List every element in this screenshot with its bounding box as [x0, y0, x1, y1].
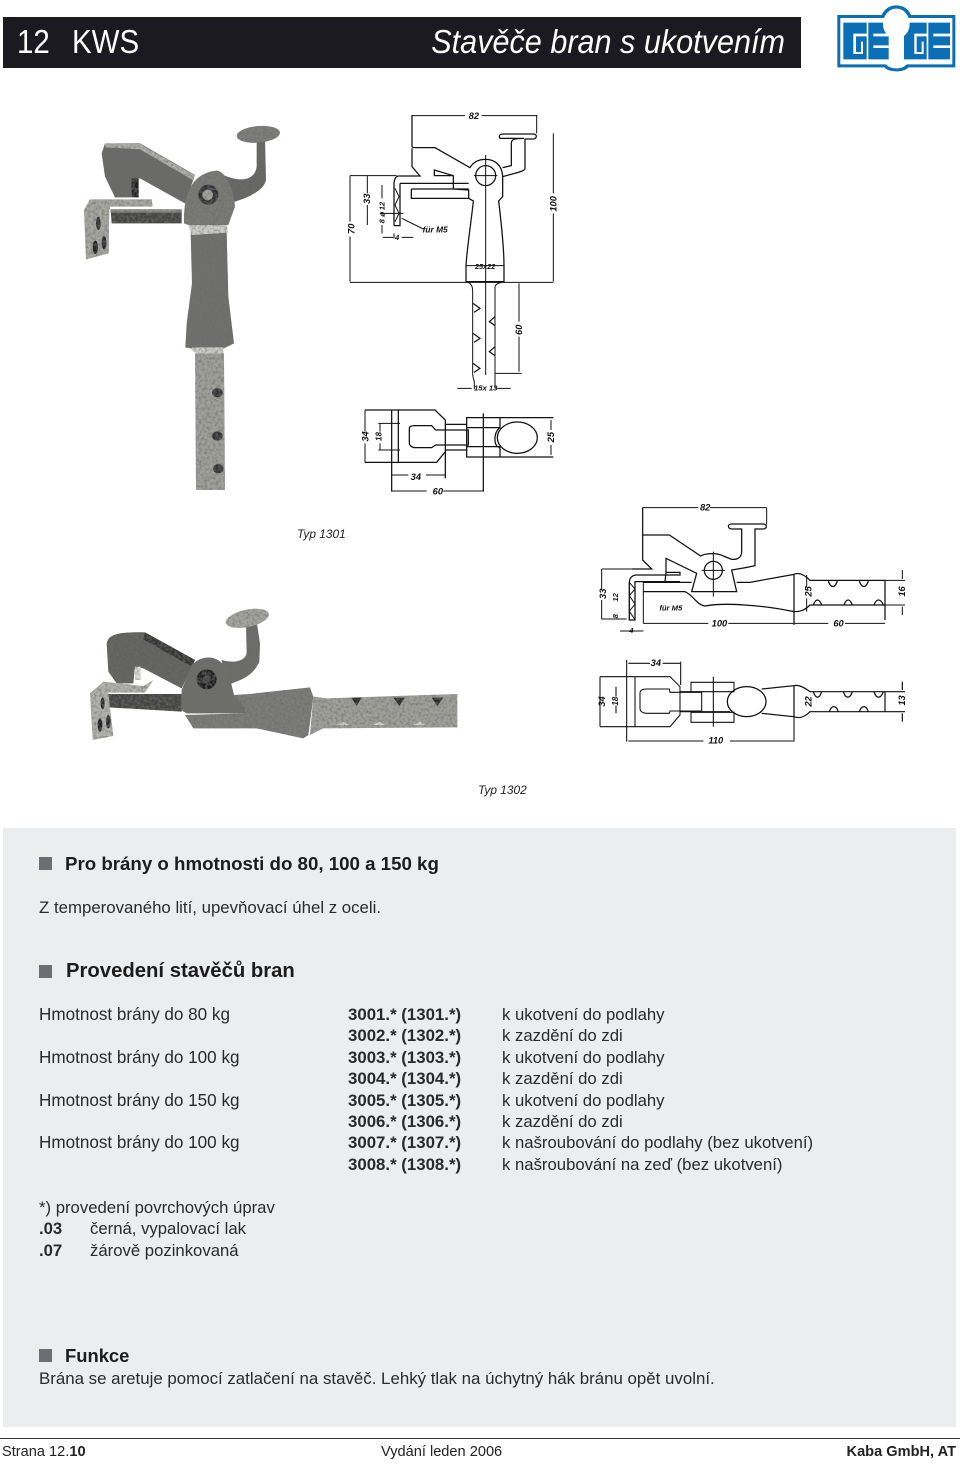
- technical drawing: type 1302: 60: [833, 618, 845, 628]
- technical drawing: type 1302: 100: [712, 618, 728, 628]
- column: mounting type: k ukotvení do podlahy: [502, 1091, 665, 1110]
- technical drawing: type 1301: 8 ⌀ 12: [377, 201, 386, 223]
- technical drawing: type 1302: 34: [651, 658, 662, 668]
- technical drawing: type 1302: 33: [598, 588, 608, 599]
- surface finish notes: [39, 1198, 275, 1260]
- technical drawing: type 1302: 13: [897, 694, 907, 706]
- technical drawing: type 1302: 34: [597, 695, 607, 707]
- column: gate weight: Hmotnost brány do 80 kg: [39, 1005, 230, 1024]
- technical drawing: type 1301: für M5: [423, 224, 448, 234]
- technical drawing: type 1301: 25: [546, 431, 556, 443]
- logo: GEGE keyhole: [837, 5, 956, 72]
- technical drawing: type 1301: 18: [375, 432, 384, 441]
- technical drawing: type 1301: 100: [549, 195, 559, 212]
- technical drawing: type 1302: für M5: [659, 603, 683, 612]
- column: article numbers: 3003.* (1303.*): [348, 1048, 461, 1067]
- caption: type 1302: Typ 1302: [478, 783, 527, 797]
- column: mounting type: [502, 1005, 813, 1174]
- column: gate weight: Hmotnost brány do 100 kg: [39, 1048, 240, 1067]
- photo: gate stopper type 1301: [84, 124, 281, 490]
- technical drawing: type 1302: 12: [611, 592, 620, 602]
- column: article numbers: 3004.* (1304.*): [348, 1069, 461, 1088]
- column: mounting type: k našroubování na zeď (bez ukotvení): [502, 1155, 782, 1174]
- version table: [39, 1005, 813, 1174]
- technical drawing: type 1301: 60: [433, 486, 444, 496]
- panel: specifications: [3, 828, 956, 1427]
- column: gate weight: Hmotnost brány do 150 kg: [39, 1091, 240, 1110]
- technical drawing: type 1302: 8: [611, 613, 620, 618]
- technical drawing: type 1301: 82: [469, 111, 480, 121]
- technical drawing: type 1301: 15x 13: [474, 384, 498, 393]
- section heading: stopper versions: Provedení stavěčů bran: [66, 960, 295, 982]
- column: mounting type: k zazdění do zdi: [502, 1112, 623, 1131]
- photo: gate stopper type 1302: [90, 605, 457, 740]
- column: mounting type: k ukotvení do podlahy: [502, 1005, 665, 1024]
- technical drawing: type 1301: 60: [514, 324, 524, 335]
- technical drawing: type 1301: 70: [346, 223, 356, 234]
- technical drawing: type 1301: 25x22: [474, 262, 495, 271]
- technical drawing: type 1301: 34: [361, 430, 371, 442]
- technical drawing: type 1301: 34: [411, 472, 422, 482]
- surface finish notes: *) provedení povrchových úprav: [39, 1198, 275, 1217]
- surface finish notes: černá, vypalovací lak: [90, 1219, 246, 1238]
- page title: Stavěče bran s ukotvením: [431, 24, 785, 60]
- technical drawing: type 1302: 16: [897, 585, 907, 597]
- technical drawing: type 1302: 4: [628, 626, 633, 635]
- chapter number and code: 12 KWS: [17, 24, 139, 61]
- surface finish notes: žárově pozinkovaná: [90, 1241, 239, 1260]
- column: article numbers: 3008.* (1308.*): [348, 1155, 461, 1174]
- page number: Strana 12.10: [2, 1444, 86, 1460]
- technical drawing: type 1302: 82: [700, 503, 711, 513]
- column: mounting type: k zazdění do zdi: [502, 1026, 623, 1045]
- edition date: Vydání leden 2006: [381, 1444, 502, 1460]
- section heading: gate weights: Pro brány o hmotnosti do 80, 100 a 150 kg: [65, 853, 439, 874]
- technical drawing: type 1302: 25: [803, 585, 813, 598]
- footer: [0, 1438, 960, 1460]
- column: mounting type: k našroubování do podlahy (bez ukotvení): [502, 1133, 813, 1152]
- technical drawing: type 1301: [346, 111, 559, 496]
- column: mounting type: k ukotvení do podlahy: [502, 1048, 665, 1067]
- technical drawing: type 1302: 110: [708, 735, 724, 745]
- company: Kaba GmbH, AT: [847, 1444, 956, 1460]
- column: article numbers: 3002.* (1302.*): [348, 1026, 461, 1045]
- technical drawing: type 1301: 33: [362, 193, 372, 204]
- column: article numbers: 3001.* (1301.*): [348, 1005, 461, 1024]
- surface finish notes: .03: [39, 1219, 62, 1238]
- column: mounting type: k zazdění do zdi: [502, 1069, 623, 1088]
- header bar: [3, 17, 801, 68]
- caption: type 1301: Typ 1301: [297, 527, 346, 541]
- column: article numbers: [348, 1005, 461, 1174]
- column: gate weight: [39, 1005, 240, 1152]
- technical drawing: type 1302: 22: [803, 695, 813, 708]
- column: gate weight: Hmotnost brány do 100 kg: [39, 1133, 240, 1152]
- material description: Z temperovaného lití, upevňovací úhel z oceli.: [39, 898, 381, 917]
- technical drawing: type 1301: 4: [394, 233, 400, 242]
- section heading: function: Funkce: [65, 1345, 129, 1366]
- surface finish notes: .07: [39, 1241, 62, 1260]
- column: article numbers: 3007.* (1307.*): [348, 1133, 461, 1152]
- function description: Brána se aretuje pomocí zatlačení na stavěč. Lehký tlak na úchytný hák bránu opět uvolní.: [39, 1369, 715, 1388]
- technical drawing: type 1302: 18: [611, 696, 620, 706]
- column: article numbers: 3005.* (1305.*): [348, 1091, 461, 1110]
- technical drawing: type 1302: [597, 503, 907, 745]
- column: article numbers: 3006.* (1306.*): [348, 1112, 461, 1131]
